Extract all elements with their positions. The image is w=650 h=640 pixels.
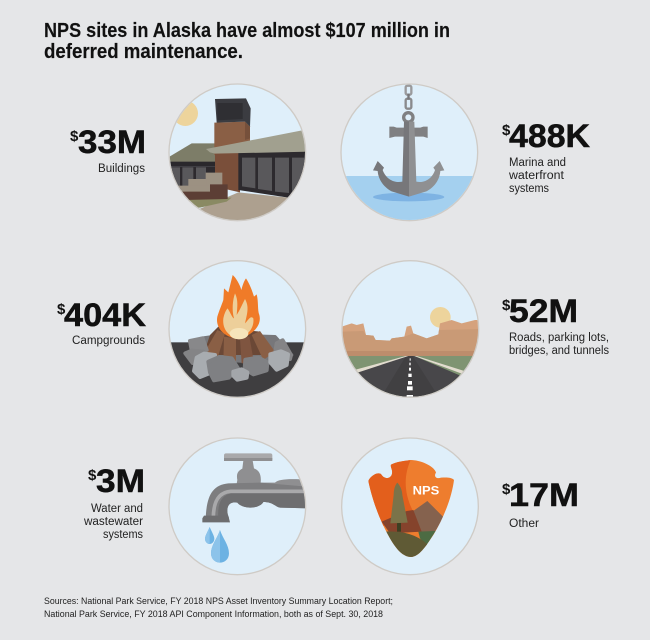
stat: buildings <box>70 124 146 175</box>
sources: Sources: National Park Service, FY 2018 NPS Asset Inventory Summary Location Report; <box>44 596 393 606</box>
stat: campgrounds: $ <box>57 301 66 318</box>
stat: water <box>83 463 145 541</box>
stat: roads <box>502 293 609 357</box>
stat: campgrounds <box>57 297 146 347</box>
title: NPS sites in Alaska have almost $107 million in <box>44 20 450 42</box>
stat: buildings: Buildings <box>98 163 145 175</box>
panel: buildings <box>70 84 307 225</box>
icon: faucet <box>169 438 307 575</box>
stat: other: $ <box>502 481 511 498</box>
stat: campgrounds: Campgrounds <box>72 335 145 347</box>
stat: water: wastewater <box>83 516 143 528</box>
stat: other: Other <box>509 518 539 530</box>
stat: water: Water and <box>91 503 143 515</box>
title <box>44 20 450 63</box>
stat: water: $ <box>88 467 97 484</box>
stat: roads: bridges, and tunnels <box>509 345 609 357</box>
panel: water and wastewater systems <box>83 438 307 575</box>
stat: roads: Roads, parking lots, <box>509 332 609 344</box>
stat: marina: systems <box>509 183 549 195</box>
stat: campgrounds: 404K <box>64 297 146 333</box>
stat: roads: 52M <box>509 293 578 329</box>
sources: National Park Service, FY 2018 API Component Information, both as of Sept. 30, 2018 <box>44 609 383 619</box>
stat: other <box>502 477 579 530</box>
icon: NPS arrowhead <box>342 438 478 575</box>
icon: road <box>342 261 482 402</box>
stat: buildings: 33M <box>78 124 146 160</box>
stat: water: systems <box>103 529 143 541</box>
stat: water: 3M <box>96 463 145 499</box>
stat: marina: Marina and <box>509 157 566 169</box>
panel: roads, parking lots, bridges, and tunnels <box>342 261 609 402</box>
sources <box>44 596 393 619</box>
stat: buildings: $ <box>70 128 79 145</box>
icon: NPS arrowhead: NPS <box>413 483 439 497</box>
panel: marina and waterfront systems <box>335 84 590 226</box>
stat: marina: waterfront <box>508 170 565 182</box>
title: deferred maintenance. <box>44 41 243 63</box>
stat: marina: $ <box>502 122 511 139</box>
icon: building <box>167 84 307 225</box>
stat: roads: $ <box>502 297 511 314</box>
stat: marina: 488K <box>509 118 590 154</box>
stat: marina <box>502 118 590 195</box>
stat: other: 17M <box>509 477 579 513</box>
panel: campgrounds <box>57 261 310 402</box>
icon: anchor <box>335 84 485 226</box>
icon: campfire <box>168 260 306 398</box>
panel: other <box>342 438 579 575</box>
